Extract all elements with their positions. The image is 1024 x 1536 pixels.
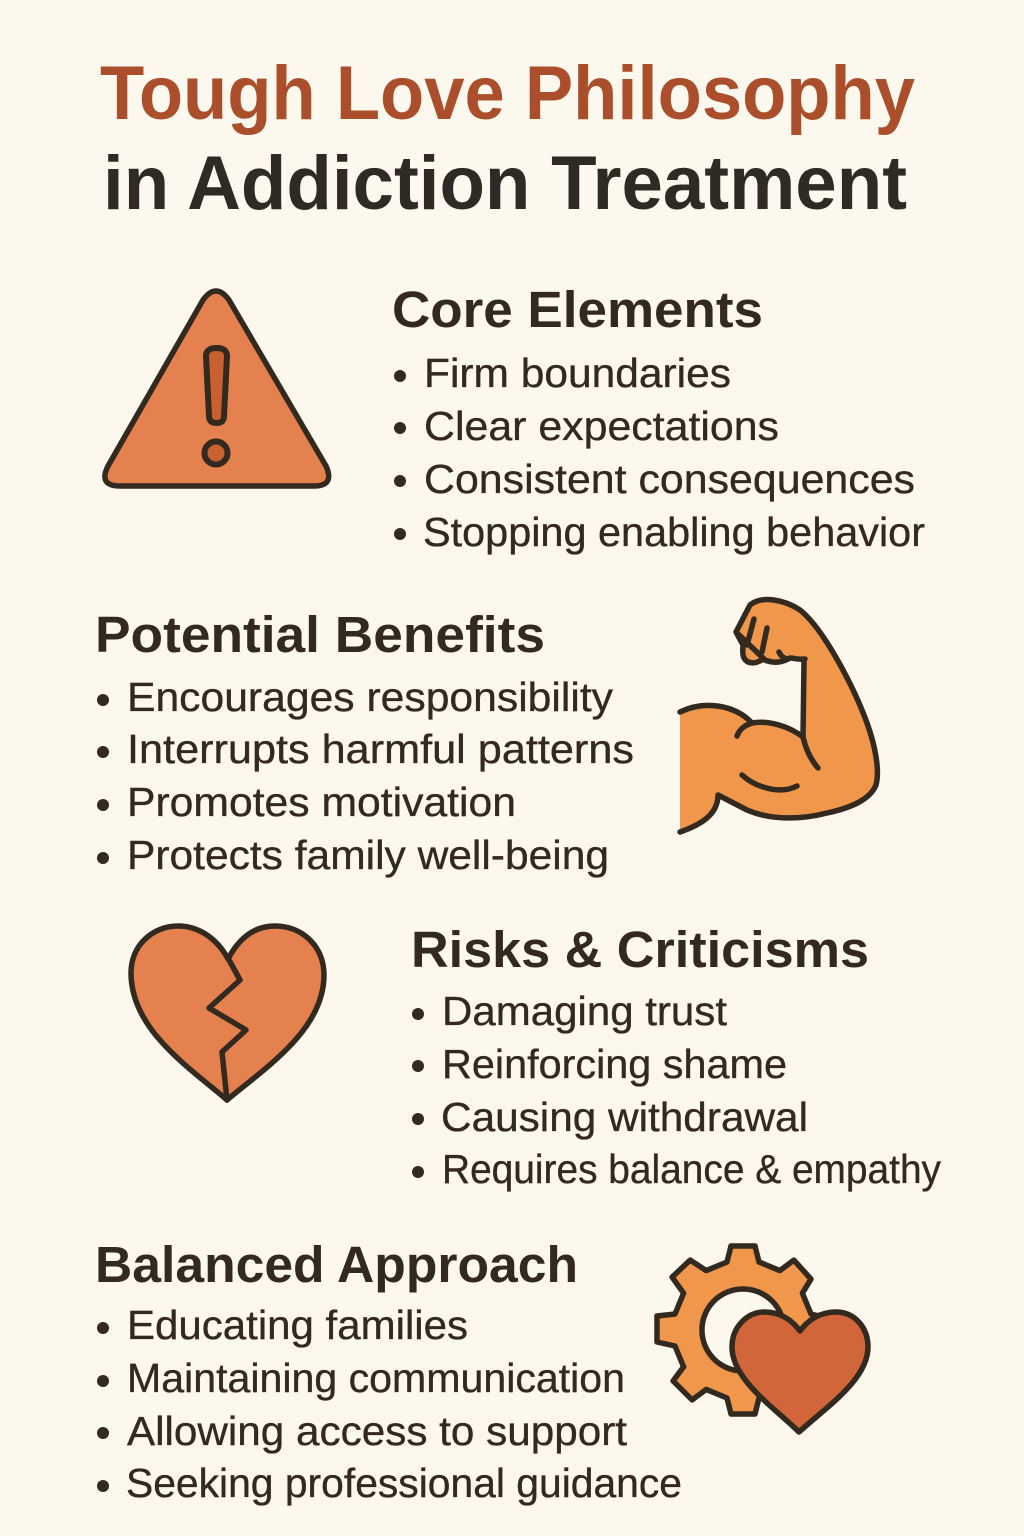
heading: balanced approach: Balanced Approach (95, 1236, 578, 1293)
list: potential benefits: Interrupts harmful patterns (127, 726, 634, 772)
list: potential benefits: Promotes motivation (127, 779, 516, 825)
list: core elements: Clear expectations (424, 403, 779, 449)
list: balanced approach: Allowing access to support (127, 1408, 628, 1454)
list: risks and criticisms: Requires balance & empathy (442, 1146, 941, 1192)
list: core elements: Consistent consequences (424, 456, 915, 502)
list: potential benefits: Encourages responsibility (127, 674, 614, 720)
heading: risks and criticisms: Risks & Criticisms (411, 921, 869, 978)
list: core elements: Firm boundaries (424, 350, 731, 396)
heading: core elements: Core Elements (392, 281, 763, 338)
panel: core elements (392, 281, 925, 555)
list: balanced approach: Educating families (127, 1302, 468, 1348)
panel: risks and criticisms (411, 921, 941, 1192)
list: balanced approach: Seeking professional guidance (126, 1460, 682, 1506)
panel: balanced approach (95, 1236, 682, 1506)
list: core elements (394, 350, 925, 555)
heading: potential benefits: Potential Benefits (95, 606, 545, 663)
list: potential benefits: Protects family well-being (127, 832, 609, 878)
list: balanced approach (97, 1302, 682, 1506)
list: risks and criticisms (412, 988, 941, 1192)
list: core elements: Stopping enabling behavior (423, 509, 925, 555)
icon: flexed arm (680, 600, 877, 832)
title: Tough Love Philosophy (100, 51, 915, 136)
list: risks and criticisms: Causing withdrawal (441, 1094, 808, 1140)
icon: warning triangle (105, 291, 329, 486)
list: balanced approach: Maintaining communication (127, 1355, 625, 1401)
list: potential benefits (97, 674, 634, 878)
icon: gear and heart (657, 1246, 868, 1432)
list: risks and criticisms: Damaging trust (442, 988, 728, 1034)
icon: broken heart (131, 926, 324, 1100)
panel: potential benefits (95, 606, 634, 878)
list: risks and criticisms: Reinforcing shame (442, 1041, 787, 1087)
title (100, 51, 915, 226)
title: in Addiction Treatment (103, 141, 907, 226)
